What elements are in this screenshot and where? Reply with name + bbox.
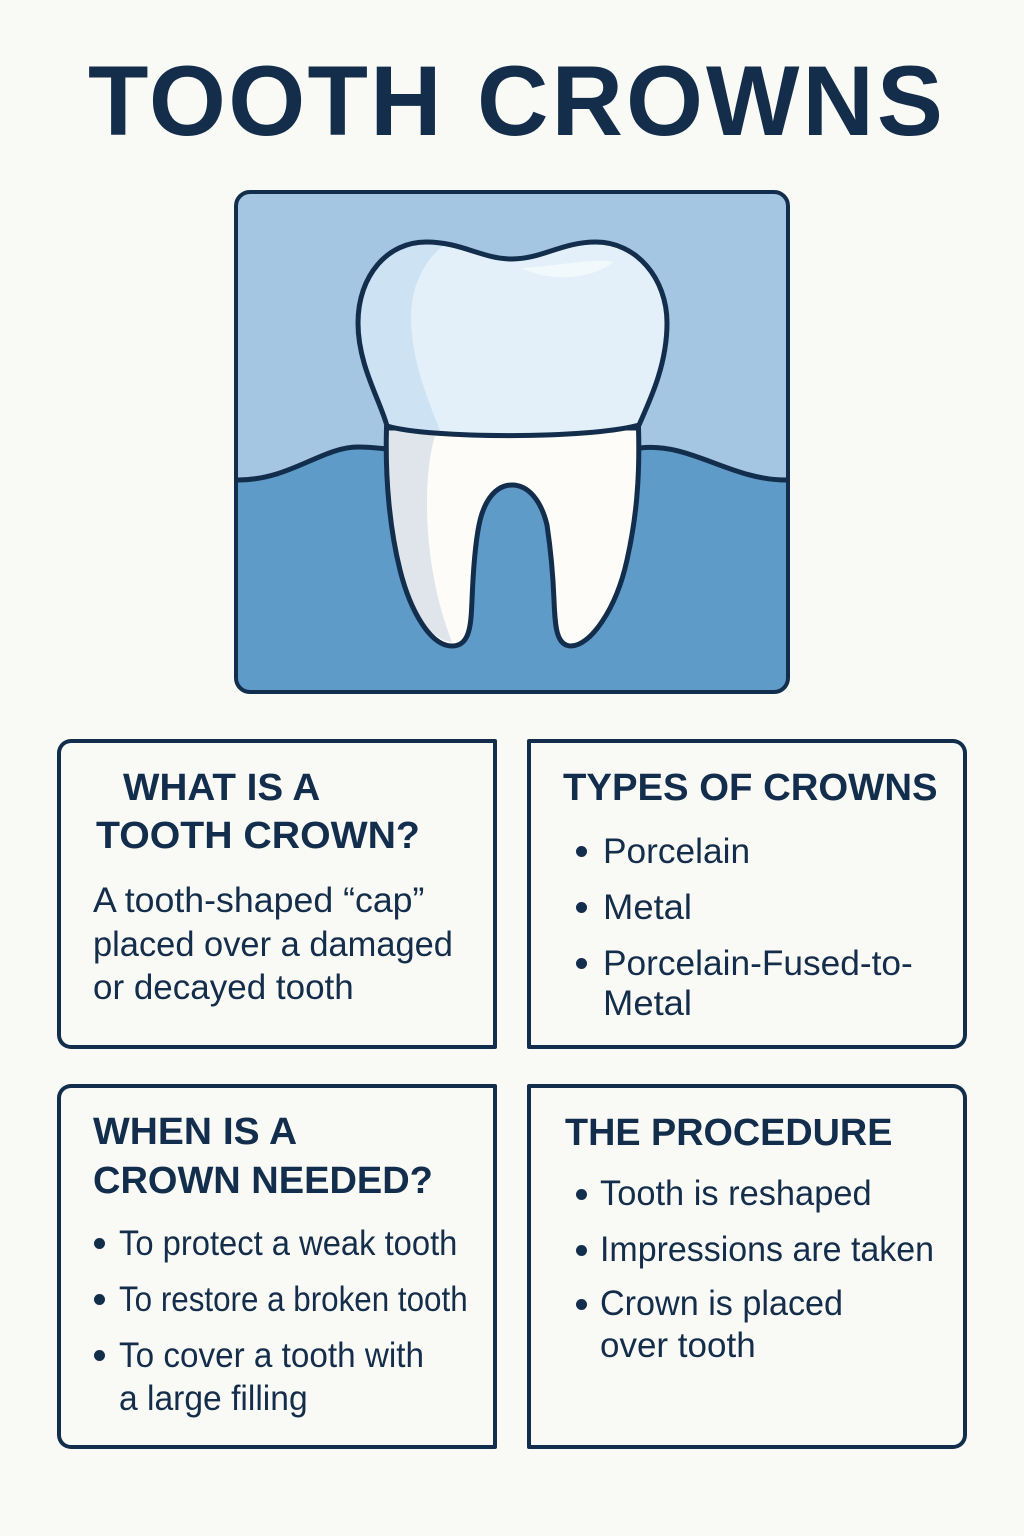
text: definition: placed over a damaged [93, 924, 453, 964]
panel: when is a crown needed [57, 1084, 497, 1449]
heading: what is a tooth crown: TOOTH CROWN? [96, 815, 420, 857]
gum [238, 447, 786, 690]
illustration: tooth with crown [234, 190, 790, 694]
panel: types of crowns [527, 739, 967, 1049]
text: definition [93, 881, 453, 1007]
heading: when is a crown needed [93, 1111, 433, 1202]
list: procedure steps: Tooth is reshaped [600, 1174, 872, 1213]
title: CROWNS [477, 45, 946, 156]
panel: what is a tooth crown [57, 739, 497, 1049]
list: reasons [94, 1224, 468, 1418]
text: definition: A tooth-shaped “cap” [93, 881, 424, 920]
heading: when is a crown needed: CROWN NEEDED? [93, 1160, 433, 1202]
text: definition: or decayed tooth [93, 968, 354, 1007]
heading: what is a tooth crown [96, 767, 420, 857]
list: procedure steps: Crown is placed [600, 1284, 843, 1323]
list: crown types: Porcelain [603, 832, 750, 871]
tooth root [386, 428, 639, 646]
heading: what is a tooth crown: WHAT IS A [123, 767, 320, 809]
title: TOOTH [88, 45, 444, 156]
list: crown types: Metal [603, 888, 692, 927]
list: crown types [576, 832, 913, 1023]
heading: the procedure: THE PROCEDURE [565, 1112, 892, 1154]
list: procedure steps: Impressions are taken [600, 1230, 934, 1269]
panel: the procedure [527, 1084, 967, 1449]
list: crown types: Metal [603, 984, 692, 1023]
heading: types of crowns: TYPES OF CROWNS [563, 767, 938, 809]
list: procedure steps: over tooth [600, 1326, 756, 1365]
list: reasons: a large filling [119, 1379, 308, 1418]
list: reasons: To protect a weak tooth [119, 1224, 457, 1263]
list: procedure steps [576, 1174, 934, 1365]
list: crown types: Porcelain-Fused-to- [603, 944, 913, 983]
crown [358, 242, 667, 436]
list: reasons: To cover a tooth with [119, 1336, 424, 1375]
heading: when is a crown needed: WHEN IS A [93, 1111, 297, 1153]
list: reasons: To restore a broken tooth [119, 1280, 468, 1319]
title [88, 45, 946, 156]
